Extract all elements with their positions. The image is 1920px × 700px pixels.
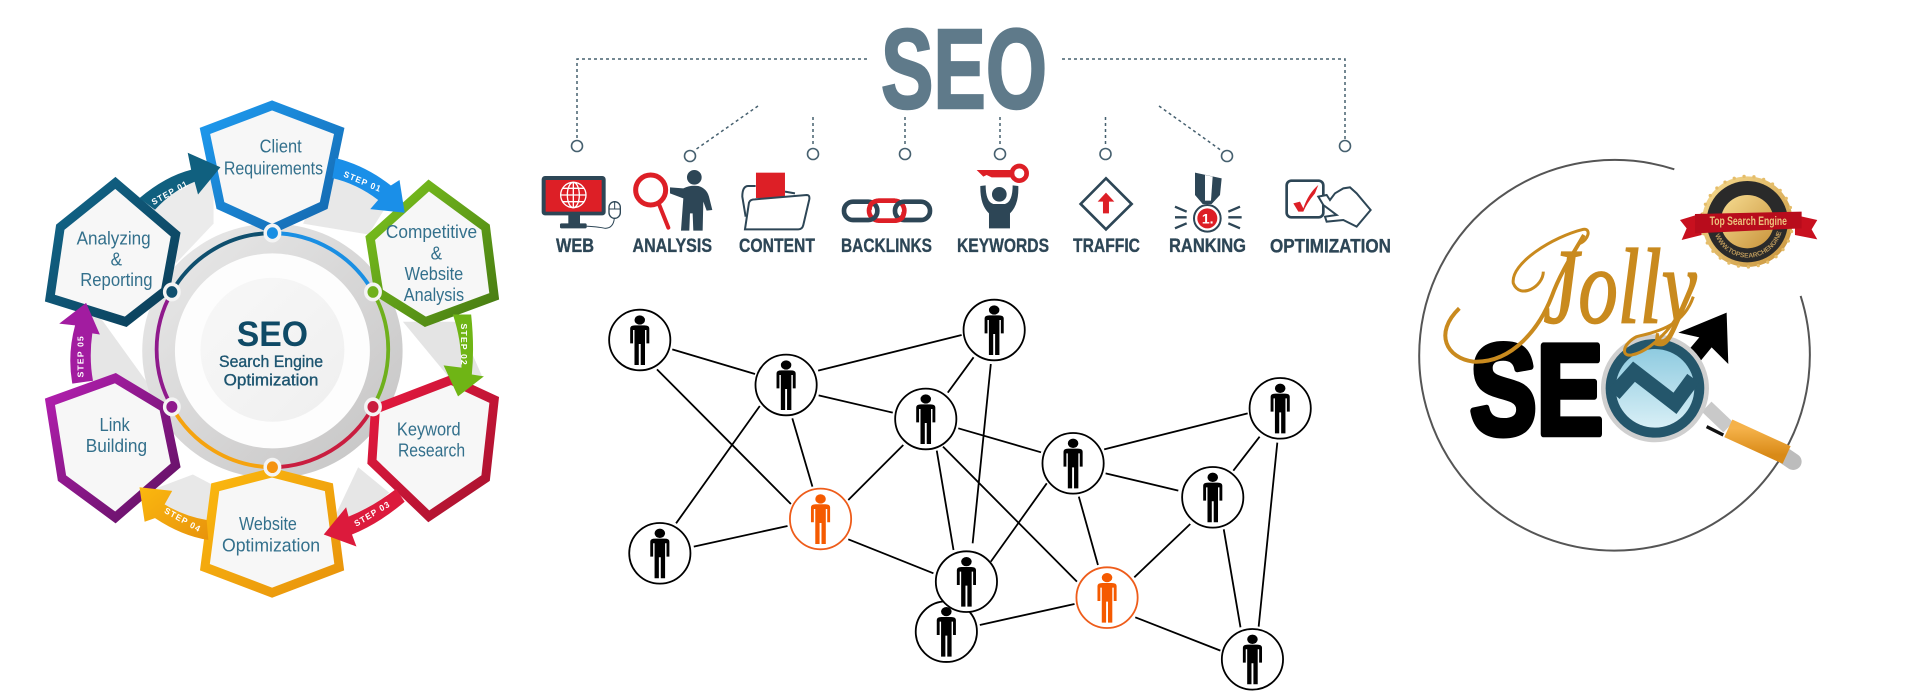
hub label: SEO Search Engine Optimization (219, 315, 323, 390)
hex: Competitive & Website Analysis: Website (405, 264, 463, 284)
hex: Keyword Research: Research (398, 440, 465, 460)
hub label: SEO Search Engine Optimization: SEO (237, 315, 308, 354)
hex: Client Requirements (205, 105, 339, 229)
icon: ranking medal: 1. (1202, 210, 1213, 226)
orange person nodes (790, 489, 1138, 628)
wheel hub background (86, 165, 482, 536)
hex: Website Optimization: Website (239, 514, 297, 534)
arrow: step 01 blue (332, 158, 405, 213)
arrow: step 01 teal: STEP 01 (150, 178, 190, 207)
icon: optimization checkbox and hand (1287, 181, 1371, 227)
logo word: Jolly (1445, 229, 1697, 362)
hex: Keyword Research (372, 380, 494, 516)
logo word: SE: SE (1470, 319, 1603, 462)
arrow: step 01 blue: STEP 01 (342, 169, 383, 194)
icon labels: OPTIMIZATION (1270, 236, 1391, 258)
hex: Link Building (50, 378, 176, 517)
icon: ranking medal (1175, 173, 1242, 232)
hex: Competitive & Website Analysis: Analysis (404, 285, 464, 305)
hex: Analyzing & Reporting: Analyzing (77, 228, 151, 248)
hex: Client Requirements: Requirements (224, 158, 323, 179)
icon: web monitor (542, 176, 620, 228)
hex: Competitive & Website Analysis (370, 185, 494, 322)
arrow: step 02 green (444, 315, 484, 396)
badge: Top Search Engine: WWW.TOPSEARCHENGINE.IT (1716, 230, 1782, 258)
icon labels: RANKING (1169, 235, 1246, 257)
badge: Top Search Engine: Top Search Engine (1710, 214, 1787, 228)
icon labels: BACKLINKS (841, 235, 932, 257)
dashed connectors (577, 59, 1345, 151)
icon: content folder (742, 173, 809, 229)
hub label: SEO Search Engine Optimization: Optimization (224, 371, 318, 390)
hex: Client Requirements: Client (260, 136, 302, 157)
arrow: step 05 purple (59, 303, 100, 384)
arrow: step 05 purple: STEP 05 (76, 335, 86, 378)
hex: Website Optimization: Optimization (222, 535, 320, 556)
connecting arcs (157, 233, 388, 467)
icon labels: WEB (556, 235, 594, 257)
icon labels: CONTENT (739, 235, 815, 257)
hex: Website Optimization (205, 473, 339, 593)
hex: Keyword Research: Keyword (397, 419, 461, 440)
icon labels (556, 235, 1391, 258)
panel: Jolly SEO logo (1418, 158, 1818, 552)
hex: Competitive & Website Analysis: & (431, 243, 442, 263)
hex: Analyzing & Reporting: Reporting (80, 270, 153, 290)
icon labels: ANALYSIS (632, 235, 712, 257)
icon: backlinks chain (844, 201, 930, 221)
arrow: step 04 yellow: STEP 04 (163, 505, 203, 534)
panel: SEO keyword diagram (542, 6, 1391, 258)
arrow: step 02 green: STEP 02 (459, 324, 469, 366)
black person figures (630, 305, 1290, 684)
hub label: SEO Search Engine Optimization: Search Engine (219, 353, 323, 371)
connector end circles (572, 140, 1350, 162)
black person nodes (609, 300, 1311, 690)
logo word: Jolly: Jolly (1543, 229, 1697, 347)
icon: keywords key and person (977, 166, 1027, 228)
icon: traffic sign (1081, 178, 1132, 229)
network connections (657, 335, 1277, 651)
arrow: step 03 red: STEP 03 (352, 499, 392, 529)
hex: Analyzing & Reporting (50, 183, 176, 322)
magnifier lens (1601, 334, 1709, 442)
badge: Top Search Engine (1680, 174, 1818, 269)
logo ring (1419, 160, 1810, 551)
panel: people network graph (609, 300, 1311, 690)
node dots (165, 225, 380, 475)
panel: SEO process wheel (50, 105, 494, 593)
arrow: step 01 teal (139, 153, 220, 210)
heading: SEO: SEO (881, 6, 1047, 132)
hex: Link Building: Building (86, 436, 147, 456)
icon labels: TRAFFIC (1073, 235, 1140, 257)
icon: analysis magnifier and person (636, 170, 712, 231)
magnifier handle (1707, 407, 1793, 462)
hex: Competitive & Website Analysis: Competitive (386, 222, 477, 242)
arrow up right (1678, 313, 1728, 364)
hex: Link Building: Link (100, 414, 130, 435)
arrow: step 03 red (324, 489, 405, 546)
icon labels: KEYWORDS (957, 235, 1049, 257)
arrow: step 04 yellow (139, 487, 208, 540)
hex: Analyzing & Reporting: & (111, 249, 122, 270)
